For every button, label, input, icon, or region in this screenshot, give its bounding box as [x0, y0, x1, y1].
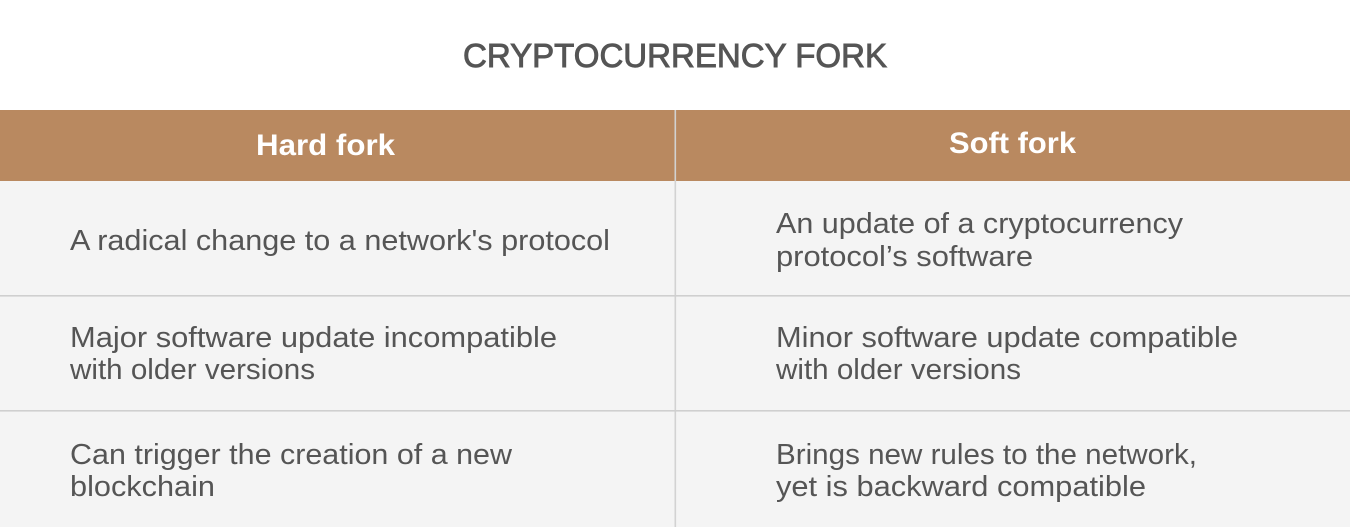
row 1: soft fork: An update of a cryptocurrency [776, 208, 1184, 240]
row 2: hard fork [69, 322, 557, 386]
row 2: soft fork: Minor software update compatible [776, 322, 1238, 354]
row 1: hard fork: A radical change to a network's protocol [70, 225, 610, 257]
row 1: soft fork: protocol’s software [776, 241, 1033, 273]
row 1: soft fork [776, 208, 1184, 273]
row 3: soft fork [776, 439, 1197, 503]
row 3: hard fork: blockchain [70, 471, 215, 503]
row 2: soft fork: with older versions [775, 354, 1021, 386]
heading: soft fork: Soft fork [949, 127, 1076, 160]
row 3: soft fork: Brings new rules to the network, [776, 439, 1197, 471]
table header band [0, 110, 1350, 527]
row 3: hard fork [70, 439, 513, 503]
row 2: hard fork: with older versions [69, 354, 315, 386]
row 3: soft fork: yet is backward compatible [776, 471, 1146, 503]
title: CRYPTOCURRENCY FORK [463, 37, 887, 74]
row 2: hard fork: Major software update incompatible [70, 322, 557, 354]
heading: hard fork: Hard fork [256, 129, 395, 162]
row 2: soft fork [775, 322, 1238, 386]
row 3: hard fork: Can trigger the creation of a new [70, 439, 513, 471]
